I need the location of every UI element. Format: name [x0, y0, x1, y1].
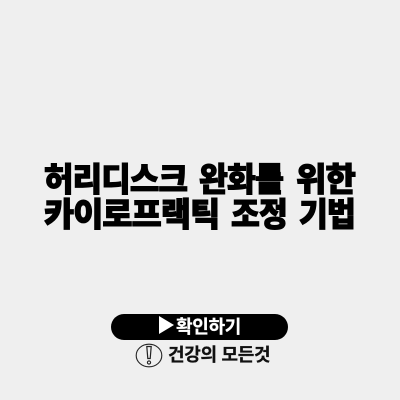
button: 확인하기 [111, 314, 288, 340]
title line 1: 완화를 [199, 161, 283, 198]
title line 1 [44, 161, 356, 198]
brand name: 건강의 모든것 [168, 345, 270, 365]
title line 1: 허리디스크 [44, 161, 187, 198]
icon: exclamation circle [136, 344, 162, 368]
brand: 건강의 모든것 [136, 344, 270, 368]
icon: play triangle [159, 316, 174, 334]
title [44, 161, 356, 233]
title line 2: 조정 [231, 196, 287, 233]
title line 2: 카이로프랙틱 [44, 196, 219, 233]
button label: 확인하기 [176, 317, 241, 337]
title line 2 [44, 196, 355, 233]
title line 2: 기법 [299, 196, 355, 233]
title line 1: 위한 [296, 161, 355, 198]
